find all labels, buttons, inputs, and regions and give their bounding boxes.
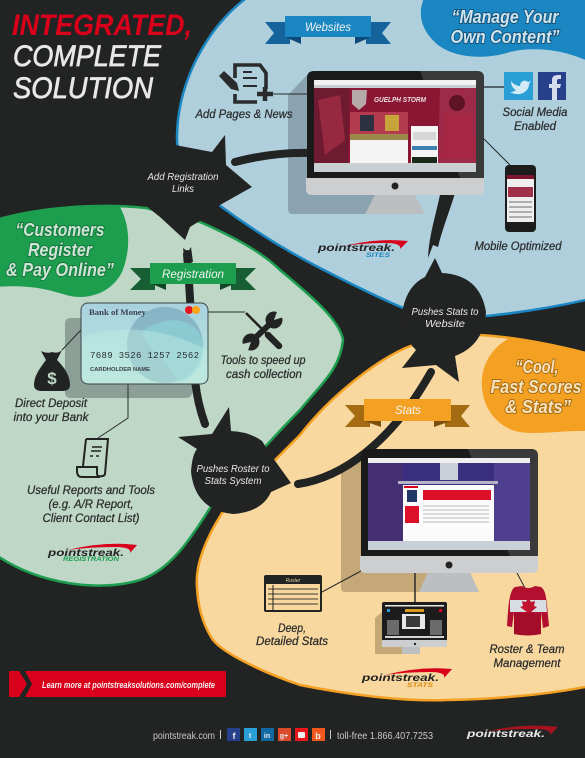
- label: roster and team management: [490, 642, 564, 670]
- icon: add pages: [219, 65, 273, 102]
- arrow: stats to website: [428, 190, 456, 258]
- screen: guelph storm website: [314, 80, 476, 172]
- credit card: [81, 303, 208, 384]
- arrow: roster to stats: [298, 372, 431, 484]
- callout: cool fast scores and stats: “Cool,: [516, 357, 558, 377]
- social icons: t: [249, 733, 252, 740]
- logo: pointstreak registration: REGISTRATION: [63, 557, 120, 563]
- icon: phone: [505, 165, 536, 232]
- logo: pointstreak registration: [47, 544, 137, 563]
- social icons: [227, 728, 325, 741]
- callout: cool fast scores and stats: [482, 338, 585, 433]
- title: [12, 9, 192, 105]
- icon: reports: [77, 439, 108, 477]
- badge: pushes stats: Website: [425, 319, 465, 330]
- label: roster and team management: Roster & Team: [490, 642, 564, 656]
- callout: customers register and pay online: “Customers: [16, 220, 104, 240]
- label: useful reports: (e.g. A/R Report,: [48, 497, 134, 511]
- icon: money bag: $: [47, 369, 57, 388]
- label: social media enabled: [502, 105, 568, 133]
- ribbon: websites: Websites: [305, 20, 351, 34]
- social icons: f: [232, 731, 236, 741]
- monitor shadow: stats: [341, 453, 430, 592]
- call to action: Learn more at pointstreaksolutions.com/complete: [42, 680, 215, 690]
- ribbon: stats: Stats: [395, 403, 421, 417]
- credit card: 7689 3526 1257 2562: [90, 351, 199, 361]
- badge: pushes roster: [178, 407, 291, 514]
- logo: pointstreak sites: pointstreak.: [317, 243, 395, 254]
- title: SOLUTION: [13, 72, 153, 105]
- callout: manage your own content: [421, 0, 585, 62]
- monitor: stats: [360, 449, 538, 592]
- logo: pointstreak stats: STATS: [407, 683, 433, 689]
- label: direct deposit: [14, 396, 89, 424]
- callout: cool fast scores and stats: & Stats”: [505, 397, 571, 417]
- label: tools: Tools to speed up: [220, 353, 306, 367]
- ribbon: websites: [265, 16, 391, 44]
- label: mobile optimized: Mobile Optimized: [474, 239, 562, 253]
- arrow: links to website: [235, 153, 312, 162]
- monitor shadow: websites: [288, 75, 400, 214]
- label: deep detailed stats: Deep,: [278, 621, 306, 635]
- icon: facebook: [538, 72, 566, 100]
- footer: pointstreak.com: [153, 731, 215, 742]
- badge: pushes stats: Pushes Stats to: [412, 307, 479, 318]
- badge: pushes roster: Pushes Roster to: [196, 464, 270, 475]
- label: deep detailed stats: [256, 621, 328, 648]
- logo: pointstreak sites: [317, 240, 408, 259]
- connector lines: [62, 87, 526, 602]
- ribbon: registration: Registration: [162, 267, 224, 281]
- callout: manage your own content: Own Content”: [450, 27, 560, 47]
- label: tools: [220, 353, 306, 381]
- label: tools: cash collection: [226, 367, 302, 381]
- credit card: Bank of Money: [89, 307, 147, 317]
- credit card: CARDHOLDER NAME: [90, 367, 150, 373]
- badge: add registration links: [145, 135, 252, 240]
- icon: tools: [238, 306, 287, 356]
- ribbon: registration: [130, 263, 256, 290]
- footer: toll-free 1.866.407.7253: [337, 731, 433, 742]
- label: add pages and news: Add Pages & News: [195, 107, 292, 121]
- title: COMPLETE: [13, 40, 162, 73]
- badge: pushes roster: Stats System: [204, 476, 262, 487]
- callout: customers register and pay online: Register: [28, 240, 93, 260]
- logo: pointstreak: pointstreak.: [466, 729, 545, 740]
- label: social media enabled: Social Media: [502, 105, 568, 119]
- call to action: [9, 671, 226, 697]
- icon: twitter: [504, 72, 533, 100]
- label: deep detailed stats: Detailed Stats: [256, 634, 328, 648]
- screen: guelph storm website: GUELPH STORM: [374, 97, 426, 104]
- icon: jersey: [507, 586, 549, 636]
- logo: pointstreak sites: SITES: [366, 253, 390, 259]
- label: social media enabled: Enabled: [514, 119, 556, 133]
- label: useful reports: Client Contact List): [42, 511, 140, 525]
- callout: manage your own content: “Manage Your: [452, 7, 559, 27]
- arrow: registration links down: [187, 254, 205, 424]
- label: useful reports: [27, 483, 155, 525]
- badge: add registration links: Links: [172, 184, 194, 195]
- ribbon: stats: [345, 399, 470, 427]
- logo: pointstreak registration: pointstreak.: [47, 548, 124, 559]
- panel: registration: [0, 206, 343, 586]
- label: direct deposit: Direct Deposit: [15, 396, 88, 410]
- shadow: card: [65, 318, 192, 398]
- label: direct deposit: into your Bank: [14, 410, 89, 424]
- icon: roster table: [264, 575, 322, 612]
- logo: pointstreak stats: [361, 668, 452, 689]
- arrow tail notch: [183, 247, 193, 262]
- social icons: g+: [280, 733, 288, 740]
- icon: small monitor: [375, 602, 447, 654]
- social icons: b: [315, 731, 321, 741]
- label: roster and team management: Management: [494, 656, 561, 670]
- callout: customers register and pay online: [0, 206, 128, 297]
- icon: money bag: [34, 350, 70, 391]
- title: INTEGRATED,: [12, 9, 192, 42]
- logo: pointstreak: [466, 726, 558, 740]
- label: useful reports: Useful Reports and Tools: [27, 483, 155, 497]
- screen: scores page: [368, 458, 530, 550]
- social icons: in: [264, 733, 270, 740]
- panel: websites: [177, 0, 585, 317]
- badge: add registration links: Add Registration: [147, 172, 219, 183]
- callout: customers register and pay online: & Pay Online”: [6, 260, 114, 280]
- monitor: websites: [306, 71, 484, 214]
- logo: pointstreak stats: pointstreak.: [361, 673, 439, 684]
- icon: roster table: Roster: [286, 578, 301, 584]
- badge: pushes stats: [402, 258, 486, 382]
- panel: stats: [197, 335, 585, 700]
- footer: [153, 726, 558, 742]
